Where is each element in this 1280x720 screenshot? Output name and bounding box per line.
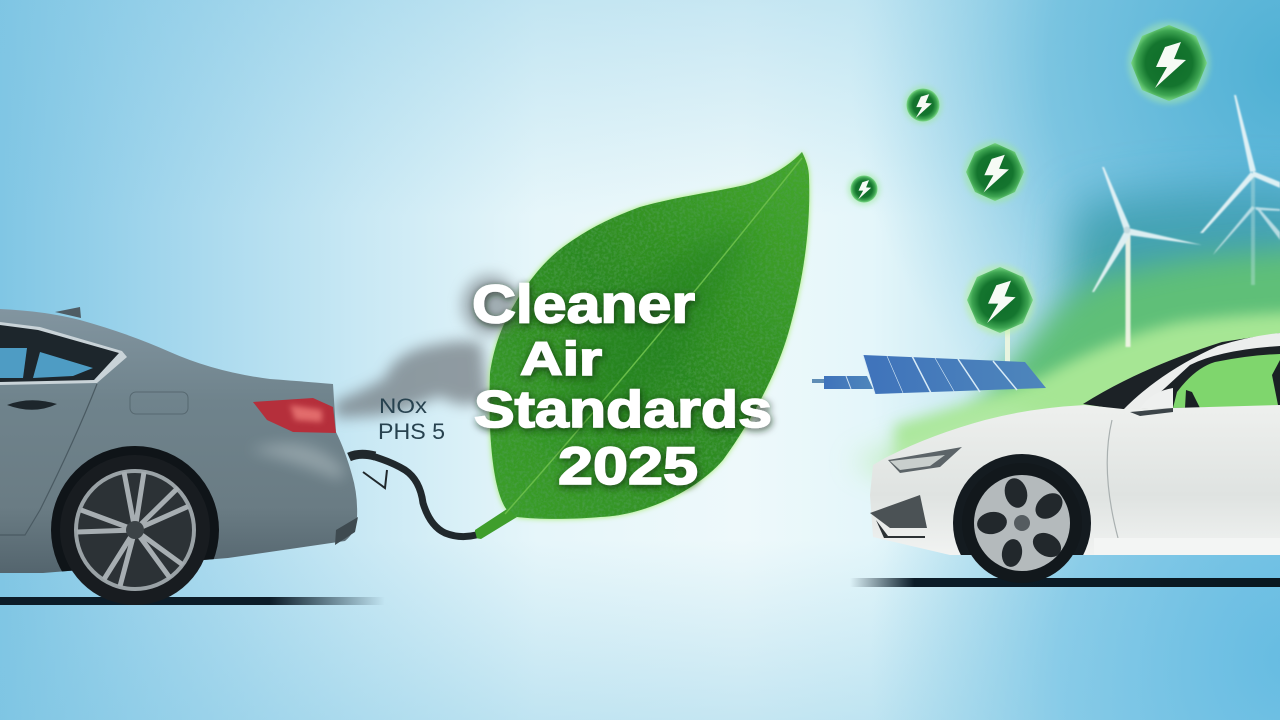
leaf dark shading: [550, 230, 750, 430]
label: NOx: NOx: [379, 395, 428, 418]
leaf stem and midrib: [475, 158, 802, 539]
icon: medium bolt badge: [964, 141, 1026, 203]
icon: tiny bolt badge: [848, 173, 880, 205]
pollutant labels: [378, 395, 445, 444]
icon: lower bolt badge: [965, 265, 1035, 335]
grey car wheel arch: [51, 446, 219, 572]
ground shadow: white car: [850, 578, 1280, 587]
white car lower intake: [876, 520, 925, 538]
grey car door handle: [7, 400, 57, 410]
leaf glow: [490, 152, 809, 519]
grey petrol car: [0, 307, 358, 614]
title line: Air: Air: [520, 332, 602, 385]
grey car spoiler: [55, 307, 81, 318]
grey car fuel door: [130, 392, 188, 414]
grey car tail light: [253, 398, 336, 433]
grey car rear highlight: [250, 443, 345, 480]
title line: 2025: 2025: [558, 437, 698, 496]
title line: Standards: Standards: [474, 381, 772, 439]
white car headlight lens: [890, 455, 945, 470]
white car door seam: [1107, 420, 1118, 538]
white car sill: [1094, 538, 1280, 555]
title smoke halo: [462, 275, 518, 335]
leaf blade: [490, 152, 809, 519]
icon: distant turbine pole: [1005, 325, 1010, 362]
grey car window frame: [0, 322, 127, 385]
fuel hose: [349, 454, 476, 537]
white car wheel arch: [953, 454, 1091, 555]
white car headlight: [888, 447, 962, 473]
leaf: [475, 152, 809, 539]
white car wheel: [962, 463, 1082, 583]
green landscape backdrop: [850, 187, 1280, 482]
grey car bumper vent: [335, 517, 358, 545]
energy icons: [848, 22, 1210, 335]
white car wing mirror: [1130, 388, 1173, 416]
icon: small bolt badge top: [904, 86, 942, 124]
white car body: [870, 405, 1280, 555]
turbine: rear lower: [1213, 206, 1280, 255]
wind turbines: [1092, 95, 1280, 347]
grey car wheel: [60, 455, 210, 605]
ground shadow: grey car: [0, 597, 385, 605]
white electric car: [870, 333, 1280, 592]
icon: large bolt badge: [1128, 22, 1210, 104]
label: PHS 5: PHS 5: [378, 419, 445, 444]
white car side window: [1173, 354, 1280, 408]
turbine: front: [1092, 167, 1202, 347]
turbine: rear upper: [1200, 95, 1280, 285]
grey car door seam: [0, 384, 97, 535]
white car roof pillar: [1123, 333, 1280, 410]
grey car body: [0, 309, 357, 573]
large solar panel: [863, 355, 1046, 394]
grey car window panes: [0, 348, 93, 378]
exhaust smoke: [334, 341, 488, 418]
white car front grille: [870, 495, 927, 528]
grey car window glass: [0, 325, 119, 382]
solar panels: [812, 355, 1046, 394]
small solar panel: [812, 376, 873, 389]
title: [472, 274, 772, 496]
white car seat headrests: [1185, 360, 1280, 408]
white car windscreen and cabin dark: [1083, 333, 1280, 410]
title line: Cleaner: Cleaner: [472, 274, 695, 334]
